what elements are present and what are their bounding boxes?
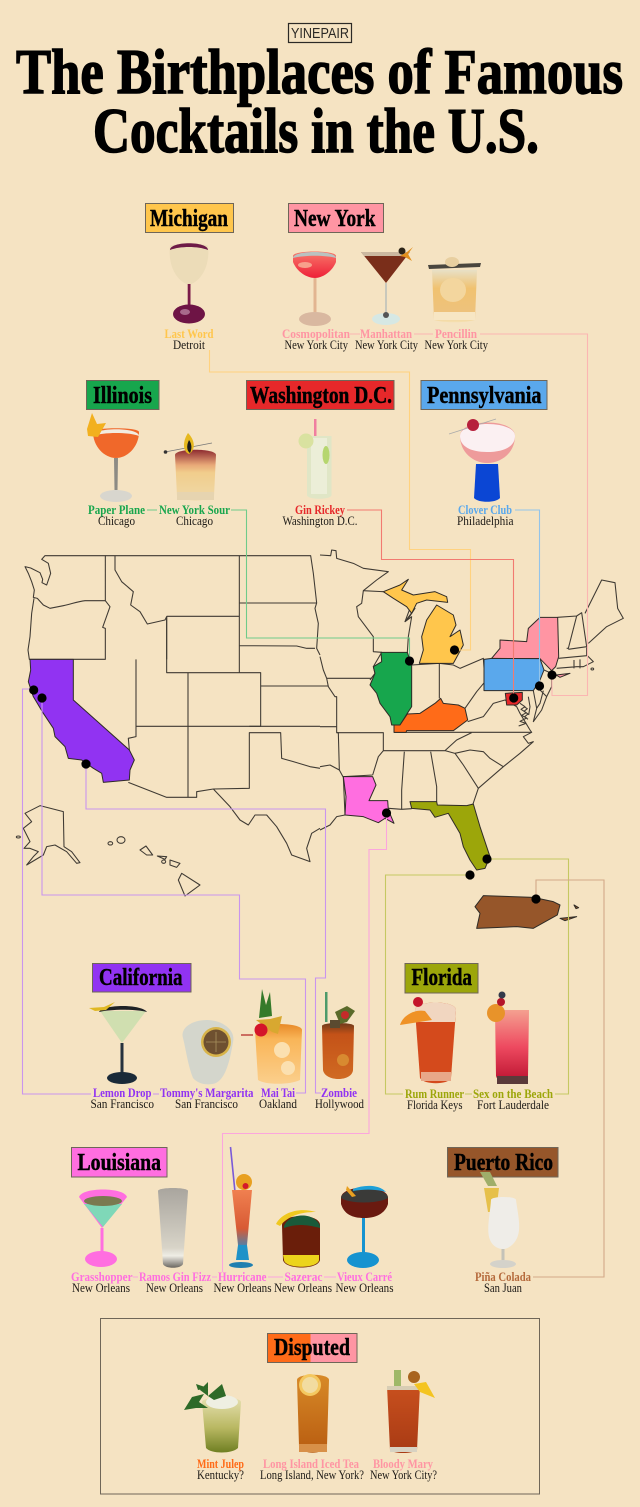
- badge: Washington D.C.: Washington D.C.: [250, 382, 392, 409]
- label: Sazerac, New Orleans: [274, 1269, 332, 1295]
- connector: Louisiana: [133, 813, 386, 1277]
- badge: Louisiana: Louisiana: [78, 1149, 161, 1176]
- connector: Michigan: [210, 350, 470, 650]
- label: Clover Club, Philadelphia: [457, 502, 514, 528]
- label: Sazerac, New Orleans: New Orleans: [274, 1280, 332, 1295]
- drink: Vieux Carré: [341, 1186, 388, 1268]
- connector: Pennsylvania: [515, 510, 540, 686]
- badge: Illinois: Illinois: [93, 382, 152, 409]
- badge: Michigan: Michigan: [150, 205, 228, 232]
- label: Tommy's Margarita, San Francisco: [160, 1085, 254, 1111]
- drink: Tommy's Margarita: [183, 1020, 233, 1084]
- label: Long Island Iced Tea, Long Island, New York?: Long Island, New York?: [260, 1467, 364, 1482]
- label: Bloody Mary, New York City?: Bloody Mary: [373, 1456, 433, 1471]
- panel: Disputed: [100, 1318, 540, 1494]
- label: Manhattan, New York City: [355, 326, 418, 352]
- label: Mint Julep, Kentucky?: Kentucky?: [197, 1467, 244, 1482]
- label: Paper Plane, Chicago: [88, 502, 145, 528]
- panel frame: [100, 1318, 540, 1494]
- label: Pencillin, New York City: [424, 326, 488, 352]
- label: Long Island Iced Tea, Long Island, New York?: [260, 1456, 364, 1482]
- connector lines: [22, 334, 604, 1277]
- label: Manhattan, New York City: Manhattan: [360, 326, 413, 341]
- label: Last Word, Detroit: Detroit: [173, 337, 205, 352]
- label: Grasshopper, New Orleans: Grasshopper: [71, 1269, 133, 1284]
- label: Zombie, Hollywood: Zombie: [321, 1085, 357, 1100]
- label: Long Island Iced Tea, Long Island, New York?: Long Island Iced Tea: [263, 1456, 359, 1471]
- logo: VinePair: YINEPAIR: [291, 26, 349, 42]
- drink: Long Island Iced Tea: [297, 1374, 329, 1453]
- label: Gin Rickey, Washington D.C.: [282, 502, 358, 528]
- label: Gin Rickey, Washington D.C.: Gin Rickey: [295, 502, 345, 517]
- badge: Pennsylvania: Pennsylvania: [427, 382, 542, 409]
- label: New York Sour, Chicago: Chicago: [176, 513, 213, 528]
- title: [16, 36, 623, 166]
- drink: New York Sour: [164, 433, 216, 500]
- label: Last Word, Detroit: Last Word: [164, 326, 214, 341]
- state: Kentucky: [394, 698, 468, 732]
- label: Bloody Mary, New York City?: [370, 1456, 437, 1482]
- label: Grasshopper, New Orleans: New Orleans: [72, 1280, 130, 1295]
- label: Tommy's Margarita, San Francisco: Tommy's Margarita: [160, 1085, 254, 1100]
- label: Rum Runner, Florida Keys: Rum Runner: [405, 1086, 464, 1101]
- drink: Clover Club: [449, 419, 515, 502]
- badge: Florida: Florida: [412, 964, 472, 991]
- connector: Zombie: [86, 764, 326, 1093]
- connector: Washington D.C.: [347, 510, 514, 698]
- label: New York Sour, Chicago: New York Sour: [159, 502, 230, 517]
- state: Washington D.C.: [505, 692, 522, 705]
- drink: Mint Julep: [184, 1382, 241, 1452]
- connector: New York: [350, 334, 588, 696]
- drink: Ramos Gin Fizz: [158, 1188, 188, 1268]
- label: Mai Tai, Oakland: Mai Tai: [261, 1085, 295, 1100]
- label: Sex on the Beach, Fort Lauderdale: Fort Lauderdale: [477, 1097, 549, 1112]
- title: Cocktails in the U.S.: [93, 95, 539, 166]
- location dots: [29, 645, 557, 904]
- label: Pencillin, New York City: New York City: [424, 337, 488, 352]
- badge: Puerto Rico: Puerto Rico: [454, 1149, 553, 1176]
- label: New York Sour, Chicago: [159, 502, 230, 528]
- label: Lemon Drop, San Francisco: Lemon Drop: [93, 1085, 152, 1100]
- label: Zombie, Hollywood: Hollywood: [315, 1096, 364, 1111]
- state: Florida: [410, 802, 490, 870]
- drink: Last Word: [170, 243, 208, 324]
- panel: Puerto Rico: [448, 1148, 558, 1295]
- label: Hurricane, New Orleans: [214, 1269, 272, 1295]
- panel: Louisiana: [71, 1147, 394, 1295]
- state: California: [28, 659, 134, 782]
- label: Clover Club, Philadelphia: Philadelphia: [457, 513, 514, 528]
- map: eastern states: [320, 550, 623, 830]
- state: Long Island: [556, 673, 570, 677]
- label: Vieux Carré, New Orleans: Vieux Carré: [337, 1269, 392, 1284]
- label: Mai Tai, Oakland: [259, 1085, 297, 1111]
- label: Cosmopolitan, New York City: Cosmopolitan: [282, 326, 351, 341]
- badge: New York: New York: [294, 205, 376, 232]
- label: Mint Julep, Kentucky?: Mint Julep: [197, 1456, 244, 1471]
- badge: Disputed: Disputed: [274, 1334, 350, 1361]
- drink: Bloody Mary: [387, 1370, 435, 1453]
- connector: Piña Colada: [533, 880, 604, 1277]
- map: highlighted states: [343, 579, 579, 928]
- connector: Lemon Drop: [22, 689, 159, 1094]
- state: Michigan upper peninsula: [383, 579, 448, 613]
- territory: Puerto Rico: [475, 896, 560, 928]
- label: Piña Colada, San Juan: [475, 1269, 531, 1295]
- label: Sex on the Beach, Fort Lauderdale: Sex on the Beach: [473, 1086, 554, 1101]
- label: Paper Plane, Chicago: Chicago: [98, 513, 135, 528]
- label: Zombie, Hollywood: [315, 1085, 364, 1111]
- drink: Zombie: [322, 992, 355, 1079]
- label: Vieux Carré, New Orleans: [336, 1269, 394, 1295]
- state: New York: [492, 617, 559, 671]
- label: Sex on the Beach, Fort Lauderdale: [473, 1086, 554, 1112]
- label: Cosmopolitan, New York City: New York City: [284, 337, 348, 352]
- label: Piña Colada, San Juan: San Juan: [484, 1280, 522, 1295]
- drink: Paper Plane: [87, 413, 139, 502]
- drink: Cosmopolitan: [293, 252, 336, 326]
- panel: Florida: [400, 964, 554, 1112]
- badge: California: California: [99, 964, 182, 991]
- label: Ramos Gin Fizz, New Orleans: New Orleans: [146, 1280, 203, 1295]
- state: Illinois: [370, 652, 412, 725]
- label: Hurricane, New Orleans: Hurricane: [218, 1269, 267, 1284]
- drink: Lemon Drop: [89, 1002, 147, 1084]
- label: Bloody Mary, New York City?: New York City?: [370, 1467, 437, 1482]
- label: Hurricane, New Orleans: New Orleans: [214, 1280, 272, 1295]
- state: Pennsylvania: [484, 658, 544, 691]
- state: Michigan lower peninsula: [419, 605, 463, 663]
- connector: Rum Runner: [386, 875, 472, 1094]
- map: western states: [16, 556, 320, 896]
- drink: Piña Colada: [480, 1172, 519, 1268]
- label: Rum Runner, Florida Keys: [405, 1086, 464, 1112]
- panel: Illinois: [86, 380, 230, 528]
- label: Sazerac, New Orleans: Sazerac: [284, 1269, 323, 1284]
- label: Ramos Gin Fizz, New Orleans: Ramos Gin Fizz: [139, 1269, 211, 1284]
- label: Paper Plane, Chicago: Paper Plane: [88, 502, 145, 517]
- drink: Sazerac: [276, 1210, 320, 1268]
- drink: Manhattan: [361, 247, 413, 325]
- drink: Pencillin: [428, 257, 481, 322]
- panel: Pennsylvania: [421, 380, 547, 528]
- panel: New York: [282, 204, 488, 352]
- label: Clover Club, Philadelphia: Clover Club: [458, 502, 512, 517]
- panel: California: [89, 964, 364, 1111]
- panel: Washington D.C.: [246, 380, 394, 528]
- label: Piña Colada, San Juan: Piña Colada: [475, 1269, 531, 1284]
- label: Vieux Carré, New Orleans: New Orleans: [336, 1280, 394, 1295]
- drink: Sex on the Beach: [487, 992, 529, 1084]
- connector: Sex on the Beach: [487, 859, 568, 1094]
- label: Manhattan, New York City: New York City: [355, 337, 418, 352]
- drink: Grasshopper: [79, 1190, 127, 1267]
- label: Grasshopper, New Orleans: [71, 1269, 133, 1295]
- label: Mai Tai, Oakland: Oakland: [259, 1096, 297, 1111]
- label: Tommy's Margarita, San Francisco: San Francisco: [175, 1096, 238, 1111]
- label: Cosmopolitan, New York City: [282, 326, 351, 352]
- label: Mint Julep, Kentucky?: [197, 1456, 244, 1482]
- drink: Rum Runner: [400, 997, 456, 1083]
- label: Gin Rickey, Washington D.C.: Washington D.C.: [282, 513, 358, 528]
- drink: Mai Tai: [241, 989, 302, 1084]
- label: Rum Runner, Florida Keys: Florida Keys: [407, 1097, 462, 1112]
- label: Pencillin, New York City: Pencillin: [435, 326, 478, 341]
- label: Lemon Drop, San Francisco: [90, 1085, 154, 1111]
- panel: Michigan: [146, 204, 234, 352]
- territory: Vieques and Culebra: [560, 905, 579, 921]
- drink: Gin Rickey: [298, 419, 332, 499]
- label: Ramos Gin Fizz, New Orleans: [139, 1269, 211, 1295]
- connector: Mai Tai: [42, 698, 306, 1093]
- drink: Hurricane: [229, 1147, 253, 1268]
- connector: Illinois: [147, 510, 410, 661]
- state: Louisiana: [343, 777, 394, 823]
- label: Last Word, Detroit: [164, 326, 214, 352]
- label: Lemon Drop, San Francisco: San Francisco: [90, 1096, 154, 1111]
